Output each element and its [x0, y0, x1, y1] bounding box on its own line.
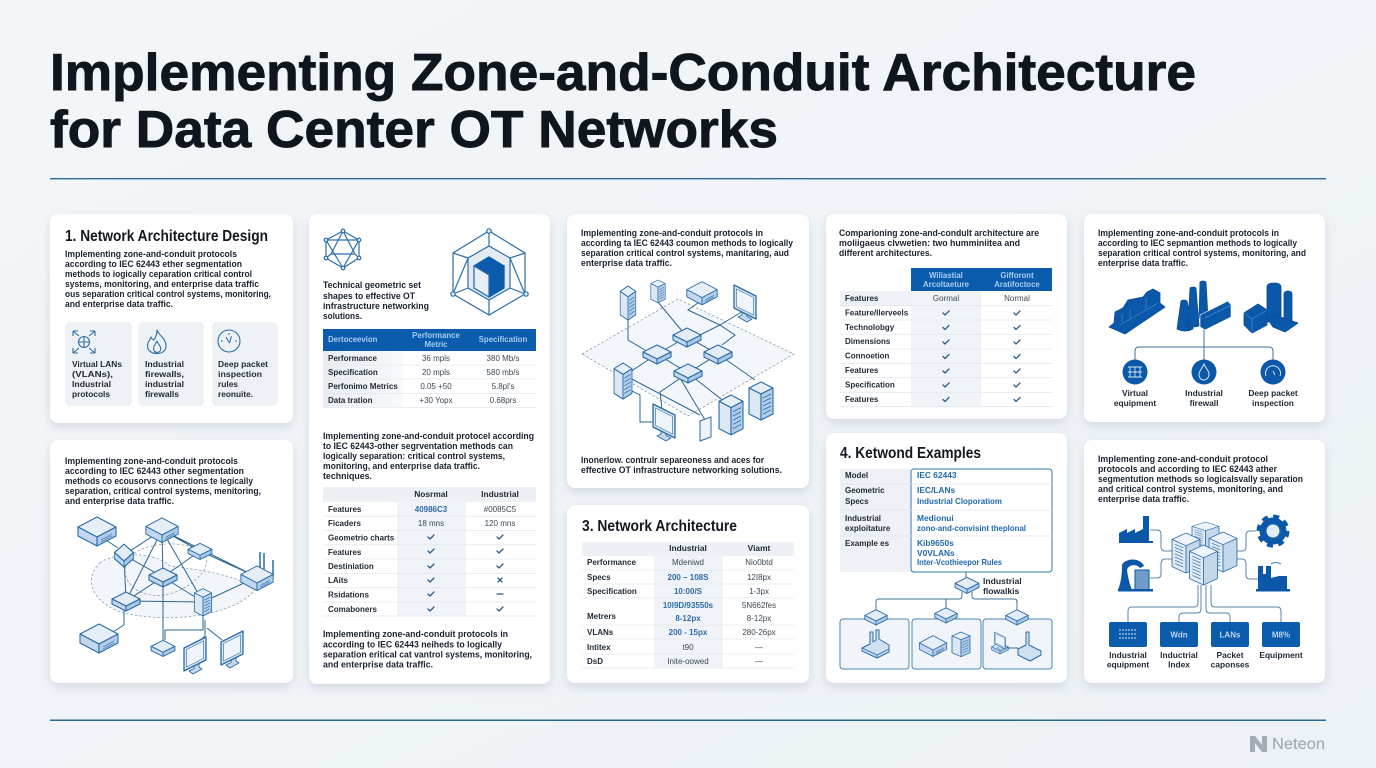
- description text: segmentution methods so logicalsvally separation: [1098, 474, 1303, 485]
- chip: industrial firewalls: [138, 322, 204, 406]
- device: switch left: [114, 544, 134, 567]
- box labels: Inductrial: [1160, 650, 1198, 660]
- keyword table: Kib9650s: [917, 538, 954, 548]
- box labels: Index: [1168, 660, 1190, 670]
- comparison table: Dimensions: [845, 337, 891, 346]
- middle text: techniques.: [323, 471, 372, 482]
- performance table: Performance: [328, 354, 377, 363]
- comparison table: Features: [845, 294, 879, 303]
- labels: inspection: [1252, 398, 1294, 408]
- box labels: Packet: [1216, 650, 1244, 660]
- comparison table: Inite-oowed: [667, 657, 709, 666]
- device: switch right: [188, 543, 212, 560]
- logo: Neteon: Neteon: [1272, 736, 1325, 753]
- chip: virtual LANs: [65, 322, 132, 406]
- chip label: inspection: [218, 369, 262, 379]
- performance table: Specification: [328, 368, 378, 377]
- description text: [1098, 228, 1306, 269]
- keyword table: IEC 62443: [917, 470, 957, 480]
- features table: Features: [328, 505, 362, 514]
- panel: data center hub: [1084, 440, 1325, 683]
- chip label: firewalls,: [145, 369, 184, 379]
- features table: Industrial: [481, 489, 519, 499]
- chip label: firewalls: [145, 389, 179, 399]
- icon: smokestacks: [1177, 281, 1231, 331]
- comparison table: Industrial: [669, 543, 707, 553]
- panel: network architecture design: [50, 214, 293, 423]
- description text: [839, 228, 1039, 259]
- chip label: Industrial: [72, 379, 111, 389]
- box labels: [1107, 650, 1303, 670]
- box labels: Industrial: [1109, 650, 1147, 660]
- performance table: 5.8pl's: [492, 382, 514, 391]
- comparison table: Arcoltaeture: [923, 280, 970, 289]
- icon: cooling tower: [1118, 560, 1153, 592]
- performance table: Performance: [412, 331, 460, 340]
- chip label: Virtual LANs: [72, 359, 122, 369]
- keyword table: zono-and-convisint theplonal: [917, 523, 1026, 533]
- keyword table: V0VLANs: [917, 548, 955, 558]
- logo: Neteon: [1250, 736, 1325, 753]
- labels: Deep packet: [1248, 388, 1298, 398]
- comparison table: [582, 542, 794, 668]
- closing text: Inonerlow. contrulr separeoness and aces for: [581, 455, 764, 466]
- chip label: Industrial: [145, 359, 184, 369]
- description text: separation critical control systems, manitaring, aud: [581, 248, 789, 259]
- comparison table: Specification: [845, 380, 895, 390]
- zone box 3: [983, 610, 1052, 669]
- description text: according to IEC 62443 other segmentation: [65, 466, 244, 477]
- comparison table: 200 - 15px: [669, 628, 708, 637]
- icon: network expand: [73, 331, 95, 353]
- heading: section 3: 3. Network Architecture: [582, 518, 737, 535]
- performance table: 36 mpls: [422, 354, 450, 363]
- keyword table: Medionui: [917, 513, 954, 523]
- features table: Ficaders: [328, 519, 361, 528]
- features table: 40986C3: [415, 505, 448, 514]
- title: [50, 44, 1196, 159]
- description text: [323, 280, 429, 322]
- chip label: [145, 359, 184, 399]
- description text: enterprise data traffic.: [1098, 258, 1188, 269]
- performance table: Dertoceevion: [328, 335, 378, 344]
- device: box: [687, 282, 717, 305]
- comparison table: Performance: [587, 558, 636, 567]
- keyword table: Model: [845, 471, 868, 480]
- comparison table: Specs: [587, 573, 611, 582]
- description text: infrastructure networking: [323, 301, 429, 312]
- closing text: [581, 455, 782, 476]
- middle text: logically separation: critical control systems,: [323, 451, 505, 462]
- description text: separation, critical control systems, menitoring,: [65, 486, 261, 497]
- comparison table: Features: [845, 366, 879, 375]
- features table: LAits: [328, 576, 349, 585]
- chip label: reonuite.: [218, 389, 253, 399]
- comparison table: Intitex: [587, 643, 611, 652]
- device: monitor bottom: [653, 404, 675, 441]
- chip label: Deep packet: [218, 359, 268, 369]
- labels: [1114, 388, 1298, 408]
- comparison table: 8-12px: [675, 614, 701, 623]
- description text: Implementing zone-and-conduit protocols: [65, 456, 238, 467]
- chip label: industrial: [145, 379, 184, 389]
- chip label: protocols: [72, 389, 110, 399]
- device: switch left: [643, 345, 671, 364]
- labelled boxes: LANs: [1220, 630, 1241, 640]
- description text: Implementing zone-and-conduit protocol: [1098, 454, 1268, 465]
- server stack: [1172, 522, 1237, 585]
- features table: Features: [328, 548, 362, 557]
- firewall tree diagram: [840, 572, 1052, 669]
- chip label: (VLANs),: [72, 369, 113, 379]
- device: top box: [146, 518, 178, 543]
- keyword table: Example es: [845, 539, 890, 548]
- description text: [1098, 454, 1303, 505]
- features table: Comaboners: [328, 605, 377, 614]
- closing text: separation eritical cat vantrol systems, monitoring,: [323, 650, 532, 660]
- title: for Data Center OT Networks: [50, 101, 778, 159]
- comparison table: Specification: [587, 587, 637, 596]
- comparison table: Feature/Ilerveels: [845, 308, 909, 318]
- device: top left box: [78, 517, 116, 546]
- zone box 2: [912, 608, 981, 669]
- device: tower: [194, 589, 212, 616]
- performance table: Specification: [479, 335, 527, 344]
- keyword table: Industrial Cloporatiom: [917, 496, 1002, 506]
- heading: section 4: 4. Ketwond Examples: [840, 445, 981, 462]
- device: switch top: [673, 328, 701, 347]
- comparison table: 5N662fes: [742, 601, 776, 610]
- comparison table: Connoetion: [845, 352, 890, 360]
- device: rack: [614, 363, 632, 399]
- middle text: [323, 431, 534, 482]
- device: center switch: [149, 568, 177, 587]
- keyword table: IEC/LANs: [917, 485, 956, 495]
- intro text: methods to iogically ceparation critical control: [65, 269, 252, 280]
- comparison table: Metrers: [587, 612, 616, 621]
- description text: and enterprise data traffic.: [65, 496, 174, 507]
- chip label: [218, 359, 268, 399]
- device: monitor left: [184, 637, 206, 674]
- intro text: and enterprise data traffic.: [65, 299, 173, 310]
- description text: protocols and according to IEC 62443 ather: [1098, 464, 1277, 475]
- comparison table: Gormal: [933, 294, 959, 303]
- keyword table: Geometric: [845, 486, 885, 495]
- comparison table: DsD: [587, 657, 603, 666]
- description text: enterprise data traffic.: [1098, 494, 1189, 505]
- labelled boxes: [1109, 622, 1300, 647]
- device: server: [620, 286, 636, 320]
- comparison table: VLANs: [587, 628, 614, 637]
- description text: enterprise data traffic.: [581, 258, 672, 269]
- comparison table: Mdeniwd: [672, 558, 704, 567]
- comparison table: 10:00/S: [674, 587, 703, 596]
- chip: deep packet inspection: [212, 322, 278, 406]
- features table: Geometrio charts: [328, 534, 395, 542]
- comparison table: [840, 268, 1052, 407]
- comparison table: —: [755, 657, 763, 666]
- icon: gauge: [218, 330, 240, 352]
- keyword table: exploitature: [845, 524, 891, 533]
- network diagram: [78, 517, 273, 674]
- device: switch right: [704, 345, 732, 364]
- closing text: Implementing zone-and-conduit protocols in: [323, 629, 508, 640]
- description text: [65, 456, 261, 507]
- features table: Destiniation: [328, 562, 374, 571]
- intro text: systems, monitoring, and enterprise data traffic: [65, 279, 259, 290]
- closing text: according to IEC 62443 neiheds to logically: [323, 640, 503, 650]
- comparison table: —: [755, 643, 763, 652]
- comparison table: t90: [682, 643, 694, 652]
- zone box 1: [840, 610, 909, 669]
- comparison table: Viamt: [748, 543, 771, 553]
- description text: Implementing zone-and-conduit protocols in: [581, 228, 763, 239]
- features table: 18 mns: [418, 519, 444, 528]
- panel: network topology diagram: [50, 440, 293, 683]
- device: tablet: [700, 417, 711, 441]
- performance table: Data tration: [328, 396, 373, 405]
- panel: geometric shapes and performance table: [309, 214, 550, 684]
- description text: and critical control systems, monitoring, and: [1098, 484, 1283, 495]
- middle text: monitoring, and enterprise data traffic.: [323, 461, 480, 472]
- keyword table: Specs: [845, 497, 869, 506]
- features table: Rsidations: [328, 590, 369, 600]
- device: tower centre: [719, 395, 743, 435]
- chip label: [72, 359, 122, 399]
- comparison table: Gifforont: [1000, 271, 1034, 280]
- keyword table: Industrial: [845, 514, 881, 523]
- panel: network architecture table: [567, 505, 809, 683]
- device: router: [241, 552, 273, 591]
- device: bottom left box: [80, 624, 118, 653]
- icon: gear: [1258, 516, 1288, 546]
- performance table: +30 Yopx: [419, 396, 453, 405]
- description text: according ta IEC 62443 coumon methods to logically: [581, 238, 794, 249]
- description text: Comparioning zone-and-condult architecture are: [839, 228, 1039, 239]
- icon: virtual equipment: [1122, 360, 1148, 384]
- middle text: to IEC 62443-other segrventation methods can: [323, 441, 513, 452]
- icon: flame: [148, 330, 166, 354]
- description text: different architectures.: [839, 248, 932, 259]
- performance table: 0.68prs: [490, 396, 516, 405]
- device: monitor top: [734, 285, 756, 322]
- keyword table: Inter-Vcothieepor Rules: [917, 557, 1002, 567]
- description text: moliigaeus clvwetien: two humminiitea and: [839, 238, 1020, 249]
- performance table: 20 mpls: [422, 368, 450, 377]
- middle text: Implementing zone-and-conduit protocel according: [323, 431, 534, 442]
- performance table: 0.05 +50: [420, 382, 452, 391]
- box labels: equipment: [1107, 660, 1149, 670]
- device: patch panel: [674, 364, 702, 383]
- intro text: [65, 249, 271, 310]
- labelled boxes: Wdn: [1170, 630, 1188, 640]
- panel: keyword examples: [826, 433, 1067, 683]
- device: left switch: [112, 592, 140, 611]
- closing text: effective OT infrastructure networking solutions.: [581, 465, 782, 476]
- comparison table: Aratifoctoce: [994, 280, 1040, 289]
- performance table: [323, 329, 536, 408]
- comparison table: 280-26px: [742, 628, 776, 637]
- description text: solutions.: [323, 311, 362, 322]
- description text: methods co ecousorvs connections te legically: [65, 476, 254, 487]
- labels: firewall: [1190, 398, 1218, 408]
- description text: Technical geometric set: [323, 280, 422, 291]
- description text: separation critical control systems, monitoring, and: [1098, 248, 1306, 259]
- labels: Industrial: [1185, 388, 1223, 398]
- firewall label: flowalkis: [983, 586, 1020, 596]
- icon: factory with smoke: [1256, 562, 1290, 592]
- chip label: rules: [218, 379, 238, 389]
- description text: according to IEC sepmantion methods to logically: [1098, 238, 1298, 249]
- description text: shapes to effective OT: [323, 291, 415, 302]
- icon: generator plant: [1109, 289, 1165, 334]
- device: bottom switch: [151, 640, 175, 656]
- isometric network diagram: [582, 280, 794, 441]
- keyword table: [840, 469, 1052, 572]
- box labels: caponses: [1211, 660, 1250, 670]
- closing text: and enterprise data traffic.: [323, 660, 433, 671]
- comparison table: 10I9D/93550s: [663, 601, 714, 610]
- heading: section 1: 1. Network Architecture Design: [65, 228, 268, 245]
- title: Implementing Zone-and-Conduit Architecture: [50, 44, 1196, 102]
- comparison table: Normal: [1004, 294, 1030, 303]
- device: panel: [651, 280, 665, 303]
- comparison table: Features: [845, 395, 879, 404]
- panel: isometric network zone: [567, 214, 809, 488]
- icon: tanks and buildings: [1244, 283, 1298, 333]
- labelled boxes: M8%: [1272, 630, 1290, 640]
- panel: industrial facilities: [1084, 214, 1325, 422]
- features table: [323, 487, 536, 616]
- box labels: Equipment: [1259, 650, 1303, 660]
- connectors: [1128, 530, 1281, 622]
- comparison table: Nio0btd: [745, 558, 773, 567]
- icon: industrial firewall: [1192, 360, 1216, 384]
- firewall label: Industrial: [983, 576, 1022, 586]
- panel: architecture comparison: [826, 214, 1067, 419]
- icon: factory: [1119, 516, 1153, 543]
- firewall label: [983, 576, 1022, 596]
- features table: Nosrmal: [414, 489, 448, 499]
- connector tree: [1135, 330, 1273, 360]
- icon: geodesic shape: [324, 229, 361, 270]
- performance table: Perfonimo Metrics: [328, 382, 398, 391]
- comparison table: 12I8px: [747, 573, 771, 582]
- device: firewall: [955, 577, 979, 594]
- features table: #0085C5: [484, 505, 517, 514]
- device: tower right: [749, 382, 773, 420]
- comparison table: 200 – 108S: [668, 573, 709, 582]
- performance table: Metric: [425, 340, 448, 349]
- comparison table: Technolobgy: [845, 323, 895, 332]
- intro text: ous separation critical control systems, monitoring,: [65, 289, 271, 300]
- icon: hexagon cube: [451, 229, 528, 315]
- device: monitor right: [221, 631, 243, 668]
- description text: [581, 228, 794, 269]
- comparison table: Wiliastial: [929, 271, 963, 280]
- closing text: [323, 629, 532, 671]
- labels: Virtual: [1122, 388, 1148, 398]
- intro text: according to IEC 62443 ether segmentation: [65, 259, 242, 270]
- icon: deep packet inspection: [1260, 360, 1286, 384]
- footer rule: [50, 720, 1326, 721]
- performance table: 380 Mb/s: [487, 354, 519, 363]
- performance table: 580 mb/s: [487, 368, 519, 377]
- comparison table: 1-3px: [749, 587, 769, 596]
- intro text: Implementing zone-and-conduit protocols: [65, 249, 237, 260]
- description text: Implementing zone-and-conduit protocols in: [1098, 228, 1279, 239]
- features table: 120 mns: [485, 519, 515, 528]
- comparison table: 8-12px: [747, 614, 771, 623]
- labels: equipment: [1114, 398, 1156, 408]
